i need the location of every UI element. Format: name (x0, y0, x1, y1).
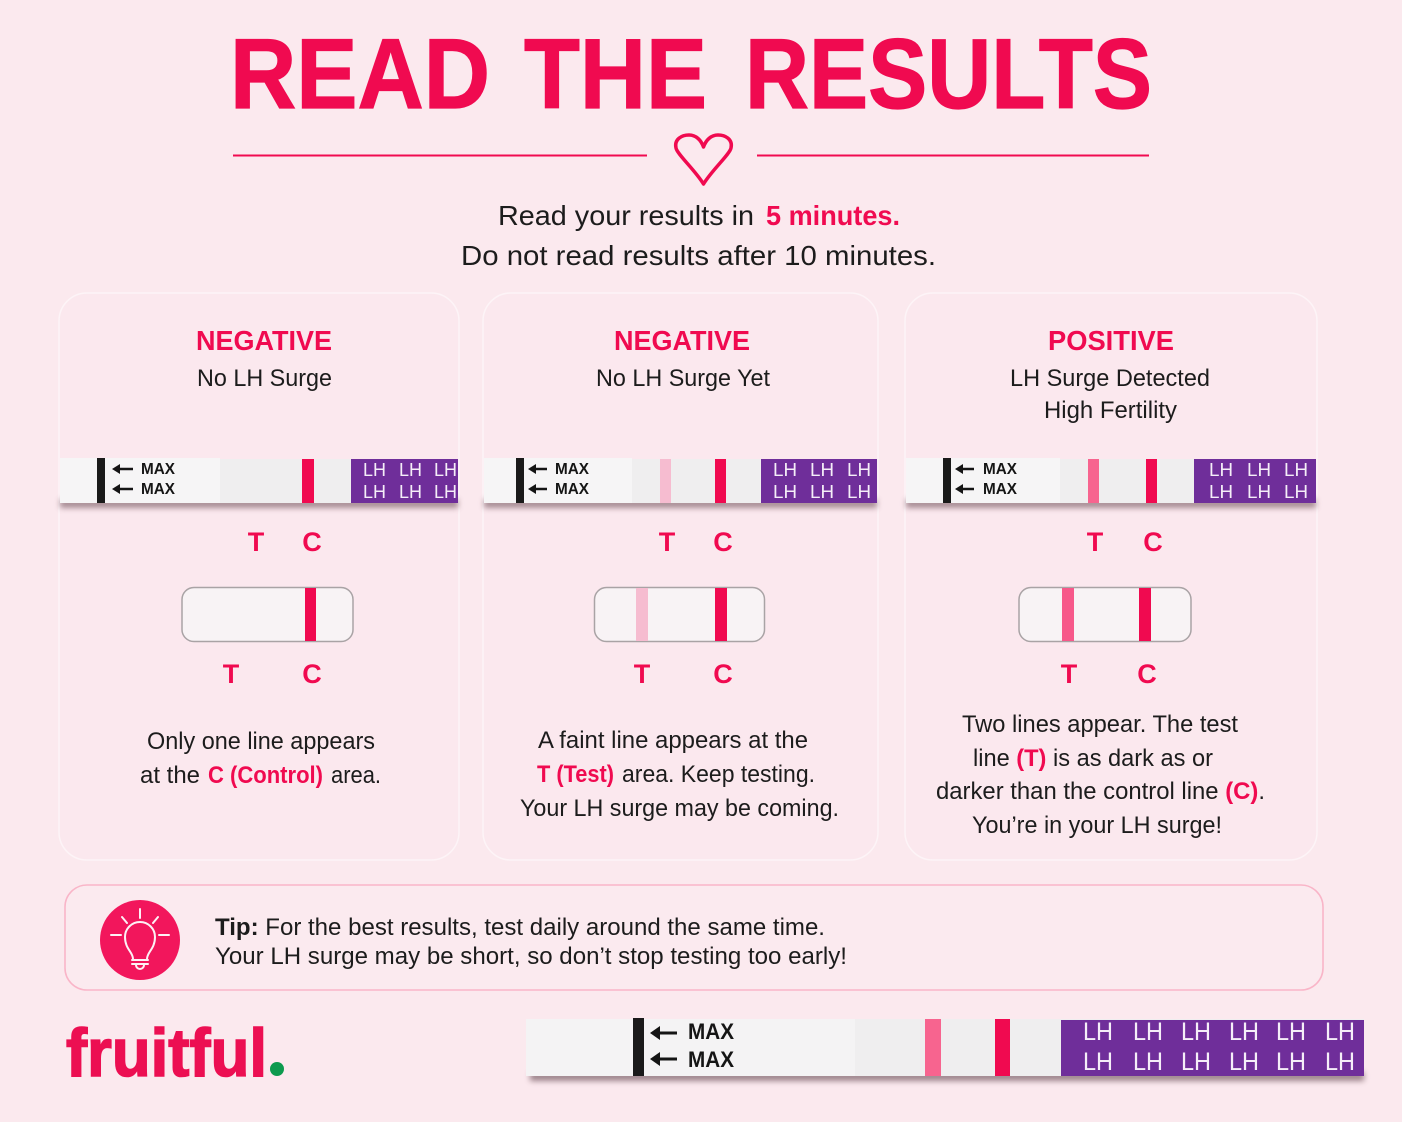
test strip: LH (1284, 460, 1308, 480)
window labels T and C: C (1137, 659, 1157, 689)
test strip: MAX (983, 481, 1017, 498)
large test strip: LH (1133, 1018, 1163, 1046)
subheading: No LH Surge Yet (596, 365, 770, 392)
test strip: MAX (141, 481, 175, 498)
subheading: High Fertility (1044, 397, 1177, 424)
window labels T and C (1061, 659, 1157, 689)
test strip: LH (399, 482, 422, 502)
strip labels T and C: T (1087, 527, 1104, 557)
test strip: LH (810, 460, 834, 480)
window labels T and C (634, 659, 733, 689)
window labels T and C (223, 659, 322, 689)
test strip (906, 458, 1316, 508)
test strip: MAX (555, 461, 589, 478)
subtitle: 5 minutes. (766, 200, 900, 231)
result window (594, 588, 764, 642)
test strip: LH (847, 482, 871, 502)
test strip: LH (1247, 460, 1271, 480)
description (520, 727, 839, 822)
test strip: LH (847, 460, 871, 480)
title: RESULTS (745, 18, 1152, 129)
panel: negative no surge (59, 293, 459, 860)
tip text (215, 914, 847, 970)
description: Only one line appears (147, 728, 375, 755)
strip labels T and C (248, 527, 322, 557)
description: darker than the control line (C). (936, 778, 1265, 805)
large test strip: LH (1325, 1018, 1355, 1046)
test strip: LH (1209, 482, 1233, 502)
strip labels T and C (1087, 527, 1163, 557)
large test strip: LH (1181, 1018, 1211, 1046)
result window (1019, 588, 1191, 642)
large test strip: LH (1083, 1018, 1113, 1046)
description: at the (140, 762, 200, 789)
result window (182, 588, 353, 642)
heading: negative: NEGATIVE (614, 325, 750, 356)
tip text: Your LH surge may be short, so don’t stop testing too early! (215, 943, 847, 970)
large test strip: LH (1133, 1048, 1163, 1076)
test strip: LH (810, 482, 834, 502)
panel: positive (905, 293, 1317, 860)
test strip (484, 458, 877, 508)
strip labels T and C: C (302, 527, 322, 557)
strip labels T and C: C (1143, 527, 1163, 557)
strip labels T and C: C (713, 527, 733, 557)
test strip: LH (399, 460, 422, 480)
test strip: LH (363, 482, 386, 502)
subheading: LH Surge Detected (1010, 365, 1210, 392)
icon: light bulb (100, 900, 180, 980)
description: area. (331, 762, 381, 789)
window labels T and C: T (634, 659, 651, 689)
title (230, 18, 1152, 129)
logo: fruitful (66, 1015, 267, 1091)
tip panel (65, 885, 1323, 990)
description (140, 728, 381, 789)
title: READ (230, 18, 490, 129)
large test strip: MAX (688, 1047, 734, 1072)
strip labels T and C: T (659, 527, 676, 557)
test strip: LH (1284, 482, 1308, 502)
test strip: LH (1247, 482, 1271, 502)
large test strip: LH (1325, 1048, 1355, 1076)
test strip: LH (363, 460, 386, 480)
test strip: LH (1209, 460, 1233, 480)
window labels T and C: T (1061, 659, 1078, 689)
strip labels T and C: T (248, 527, 265, 557)
description: Your LH surge may be coming. (520, 795, 839, 822)
large test strip: LH (1276, 1048, 1306, 1076)
large test strip: LH (1276, 1018, 1306, 1046)
strip labels T and C (659, 527, 733, 557)
description: line (T) is as dark as or (973, 745, 1213, 772)
test strip: MAX (141, 461, 175, 478)
test strip: LH (773, 460, 797, 480)
description: Two lines appear. The test (962, 711, 1238, 738)
test strip: LH (773, 482, 797, 502)
window labels T and C: C (713, 659, 733, 689)
large test strip: LH (1229, 1048, 1259, 1076)
description: You’re in your LH surge! (972, 812, 1222, 839)
subtitle: Do not read results after 10 minutes. (461, 240, 936, 271)
test strip (60, 458, 458, 508)
large test strip: LH (1229, 1018, 1259, 1046)
title: THE (524, 18, 707, 129)
description: A faint line appears at the (538, 727, 808, 754)
subtitle: Read your results in (498, 200, 754, 231)
test strip: MAX (983, 461, 1017, 478)
heading: positive: POSITIVE (1048, 325, 1174, 356)
heart divider (233, 135, 1149, 184)
subheading: No LH Surge (197, 365, 332, 392)
window labels T and C: C (302, 659, 322, 689)
test strip: LH (434, 460, 457, 480)
panel: negative faint line (483, 293, 878, 860)
tip text: Tip: For the best results, test daily around the same time. (215, 914, 825, 941)
description: T (Test) (537, 761, 614, 788)
large test strip: MAX (688, 1019, 734, 1044)
large test strip (526, 1018, 1364, 1081)
large test strip: LH (1181, 1048, 1211, 1076)
test strip: LH (434, 482, 457, 502)
subheading (1010, 365, 1210, 424)
large test strip: LH (1083, 1048, 1113, 1076)
subtitle (461, 200, 936, 271)
heading: negative: NEGATIVE (196, 325, 332, 356)
test strip: MAX (555, 481, 589, 498)
description: area. Keep testing. (622, 761, 815, 788)
description (936, 711, 1265, 839)
description: C (Control) (208, 762, 323, 789)
window labels T and C: T (223, 659, 240, 689)
